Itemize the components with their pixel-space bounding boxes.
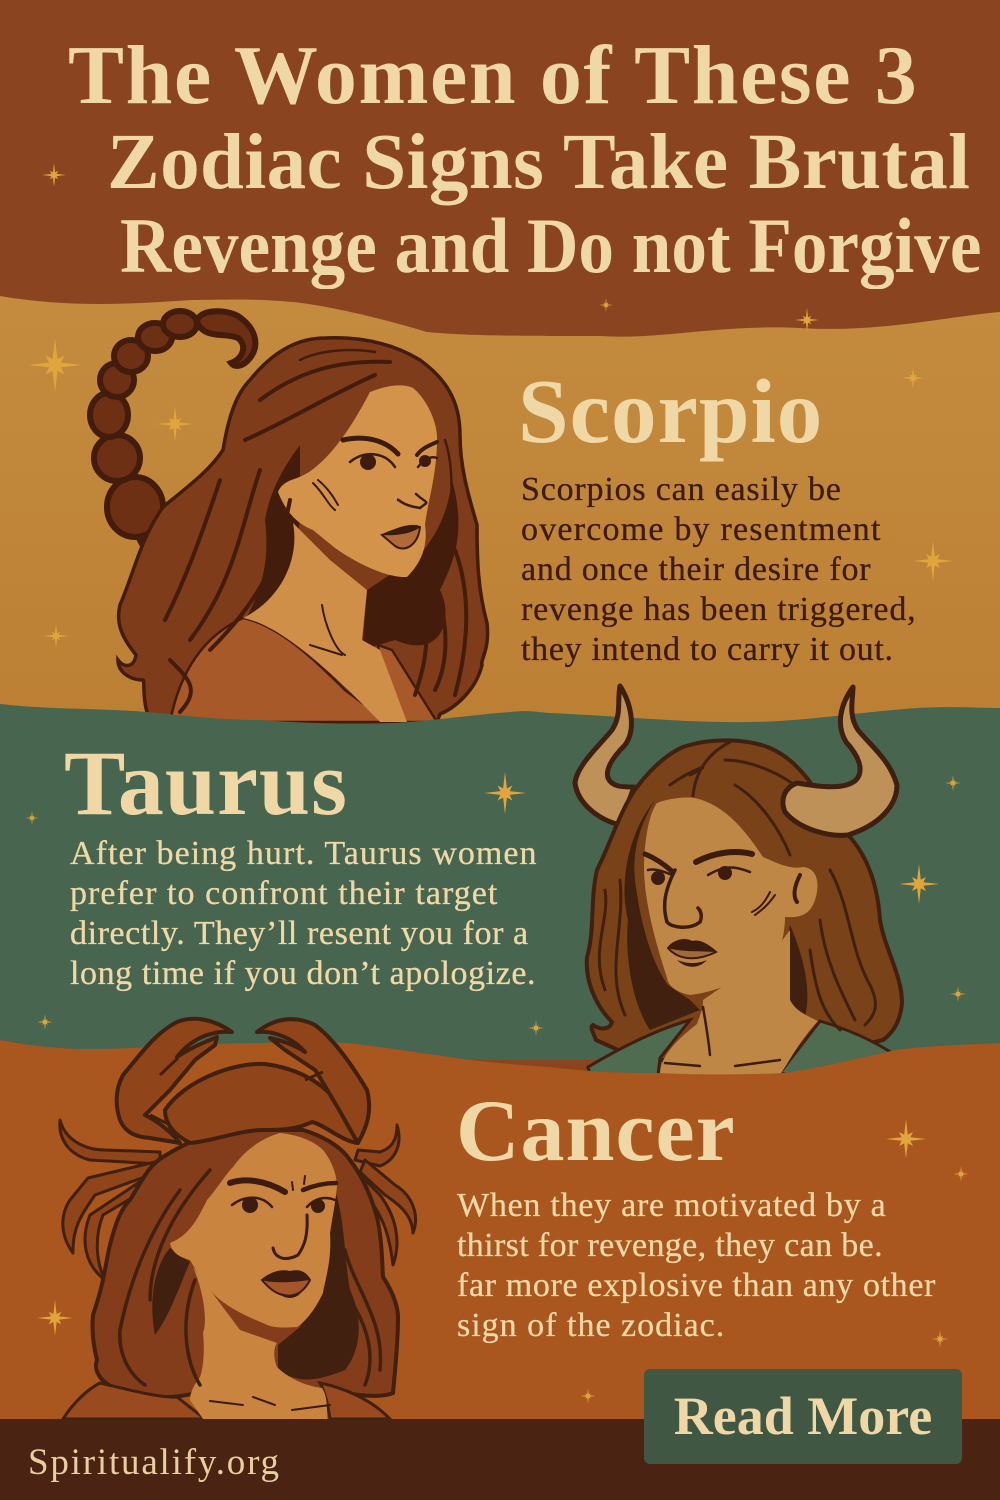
- shirt: [170, 618, 437, 722]
- text block: Scorpio description: Scorpios can easily be: [521, 471, 842, 508]
- shadow hair: [624, 800, 807, 1030]
- text block: Taurus description: directly. They’ll resent you for a: [70, 915, 529, 952]
- icon: right bull horn: [783, 687, 897, 835]
- text block: Scorpio description: revenge has been triggered,: [521, 591, 916, 628]
- neck: [190, 1267, 327, 1419]
- text block: Scorpio description: and once their desire for: [521, 551, 871, 588]
- hair strands: [120, 1170, 381, 1385]
- text block: Cancer description: thirst for revenge, they can be.: [457, 1227, 883, 1264]
- face details: [310, 438, 437, 655]
- hair: [118, 338, 488, 722]
- shirt: [63, 1383, 390, 1419]
- face: [278, 385, 437, 577]
- text block: Cancer description: far more explosive than any other: [457, 1267, 936, 1304]
- panel: taurus band: [0, 704, 1000, 1060]
- panel: cancer band: [0, 1040, 1000, 1430]
- text block: Scorpio description: overcome by resentment: [521, 511, 882, 548]
- text block: Scorpio description: they intend to carry it out.: [521, 631, 894, 668]
- footer: site name: Spiritualify.org: [28, 1442, 281, 1483]
- title: [68, 29, 981, 289]
- heading: Cancer: Cancer: [456, 1083, 736, 1180]
- text block: Taurus description: long time if you don’t apologize.: [70, 955, 536, 992]
- face: [170, 1133, 337, 1328]
- text block: Taurus description: After being hurt. Taurus women: [70, 835, 538, 872]
- shadowed hair: [278, 1190, 359, 1379]
- button: Read More: [644, 1369, 962, 1464]
- panel: scorpio band: [0, 280, 1000, 740]
- neck: [660, 930, 818, 1075]
- text block: Cancer description: sign of the zodiac.: [457, 1307, 725, 1344]
- panel: footer band: [0, 1419, 1000, 1500]
- button: Read More: Read More: [674, 1386, 932, 1446]
- hair: [587, 740, 902, 1060]
- hair strands: [599, 742, 875, 1030]
- hair strands: [165, 350, 466, 712]
- face: [644, 798, 817, 995]
- icons: sparkle stars: [25, 163, 969, 1404]
- title: Zodiac Signs Take Brutal: [107, 119, 971, 206]
- text block: Cancer description: [456, 1187, 936, 1344]
- shadowed hair under chin: [362, 480, 458, 650]
- text block: Taurus description: prefer to confront their target: [70, 875, 498, 912]
- neck: [243, 523, 407, 722]
- icon: left bull horn: [575, 686, 634, 825]
- text block: Scorpio description: [521, 471, 916, 668]
- hair: [92, 1130, 398, 1400]
- heading: Taurus: Taurus: [64, 732, 348, 834]
- heading: Scorpio: Scorpio: [518, 361, 823, 462]
- face details: [210, 1176, 336, 1410]
- illustration: scorpio woman: [90, 311, 488, 722]
- panel: title band: [0, 0, 1000, 337]
- crab legs: [60, 1120, 416, 1280]
- text block: Cancer description: When they are motivated by a: [457, 1187, 886, 1224]
- illustration: taurus woman: [575, 686, 902, 1075]
- title: Revenge and Do not Forgive: [120, 202, 981, 289]
- shirt: [588, 1020, 892, 1075]
- title: The Women of These 3: [68, 29, 918, 122]
- illustration: cancer woman: [60, 1019, 416, 1419]
- icon: scorpion tail: [90, 311, 255, 568]
- icon: crab on head: [117, 1019, 369, 1143]
- face details: [645, 852, 800, 1066]
- text block: Taurus description: [70, 835, 538, 992]
